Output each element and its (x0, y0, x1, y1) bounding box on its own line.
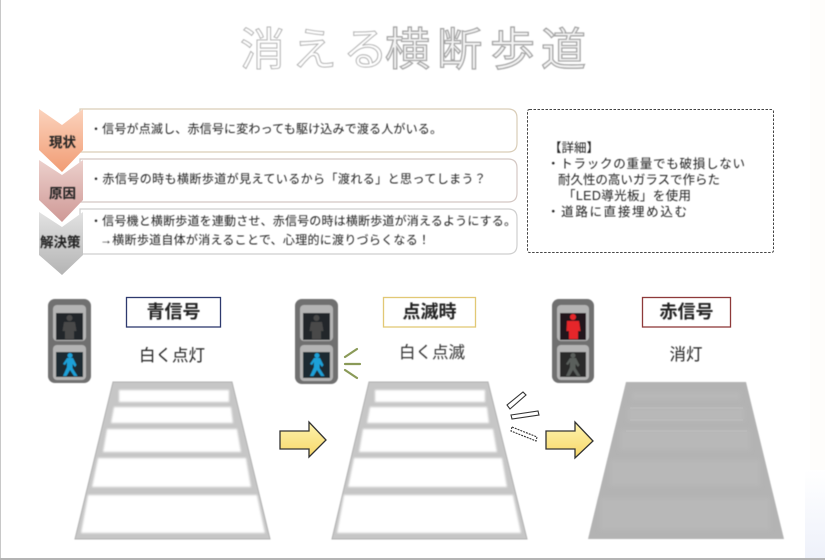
row: cause (39, 159, 517, 222)
panel: details: ・道路に直接埋め込む (547, 204, 687, 219)
signal: flashing state (295, 299, 338, 384)
row: cause: 原因 (49, 186, 76, 201)
icon: broken pieces (507, 392, 539, 441)
crossing: lit (75, 382, 270, 539)
row: solution (39, 209, 517, 275)
panel: details: 耐久性の高いガラスで作らた (558, 172, 720, 187)
label: red signal: 赤信号 (660, 302, 714, 322)
label: red signal (642, 298, 730, 327)
crossing: off (588, 382, 784, 539)
title: 消える (240, 24, 388, 75)
panel: status, cause, solution rows (39, 109, 517, 275)
row: solution: →横断歩道自体が消えることで、心理的に渡りづらくなる！ (100, 232, 430, 247)
label: flashing: 点滅時 (402, 301, 456, 322)
label: flashing (384, 298, 476, 327)
row: current situation (39, 109, 517, 172)
label: green signal: 青信号 (146, 302, 200, 322)
row: current situation: ・信号が点滅し、赤信号に変わっても駆け込みで渡る人がいる。 (90, 121, 442, 136)
arrow: green to flashing (280, 422, 326, 457)
signal: green state (48, 299, 91, 383)
caption: off: 消灯 (670, 345, 702, 364)
panel: details: 「LED導光板」を使用 (563, 188, 691, 203)
title (240, 24, 586, 75)
row: solution: 解決策 (40, 234, 81, 250)
crossing: flashing (332, 382, 527, 539)
row: current situation: 現状 (49, 134, 76, 150)
title: 横断歩道 (385, 24, 586, 75)
arrow: flashing to red (546, 422, 593, 458)
panel: details (528, 110, 774, 252)
caption: flashing white: 白く点滅 (399, 343, 466, 362)
signal: red state (552, 299, 594, 383)
icon: flashing rays (345, 349, 360, 378)
row: solution: ・信号機と横断歩道を連動させ、赤信号の時は横断歩道が消えるようにする。 (90, 213, 516, 228)
label: green signal (126, 298, 220, 327)
caption: lit white: 白く点灯 (139, 346, 205, 365)
panel: details: ・トラックの重量でも破損しない (547, 156, 745, 171)
panel: details: 【詳細】 (549, 140, 599, 155)
row: cause: ・赤信号の時も横断歩道が見えているから「渡れる」と思ってしまう？ (90, 171, 486, 186)
